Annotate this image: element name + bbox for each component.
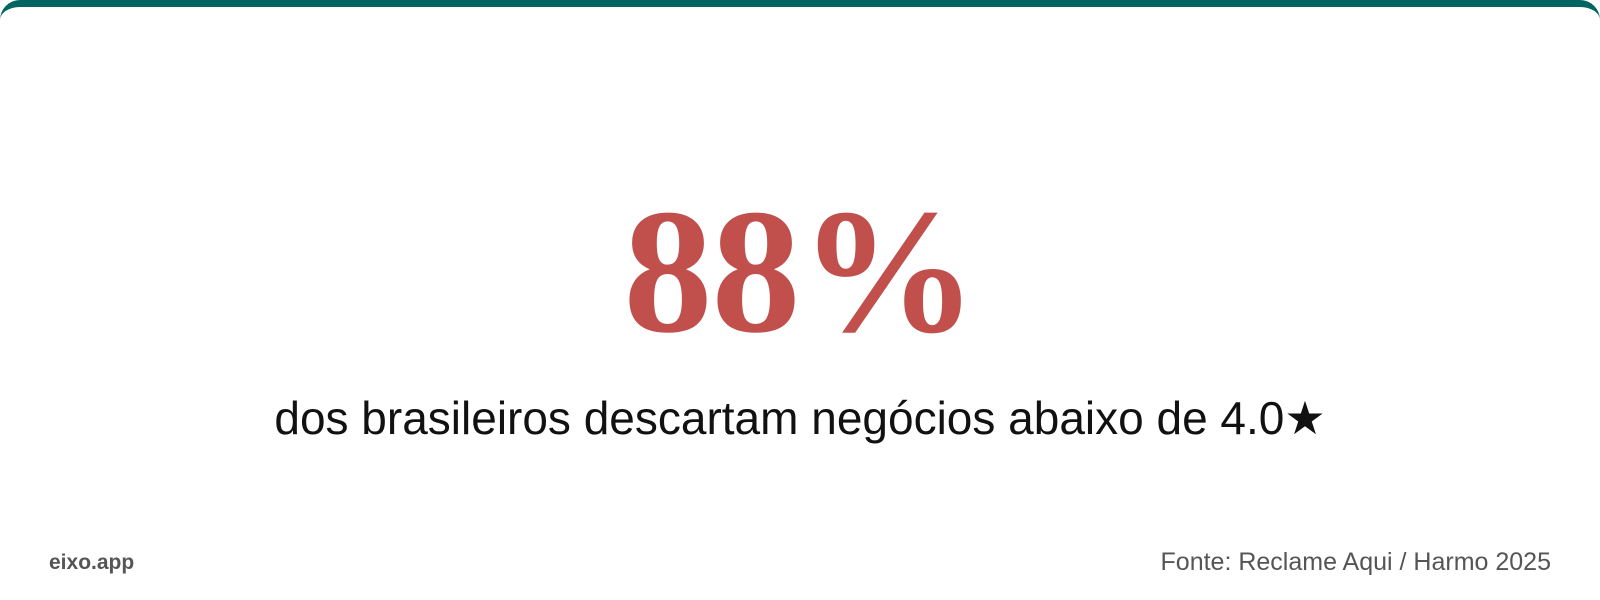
subtitle: dos brasileiros descartam negócios abaixo de 4.0★ xyxy=(274,392,1326,444)
big number: 88% xyxy=(624,172,976,370)
footer source: Fonte: Reclame Aqui / Harmo 2025 xyxy=(1161,548,1551,576)
footer brand: eixo.app xyxy=(49,551,134,574)
